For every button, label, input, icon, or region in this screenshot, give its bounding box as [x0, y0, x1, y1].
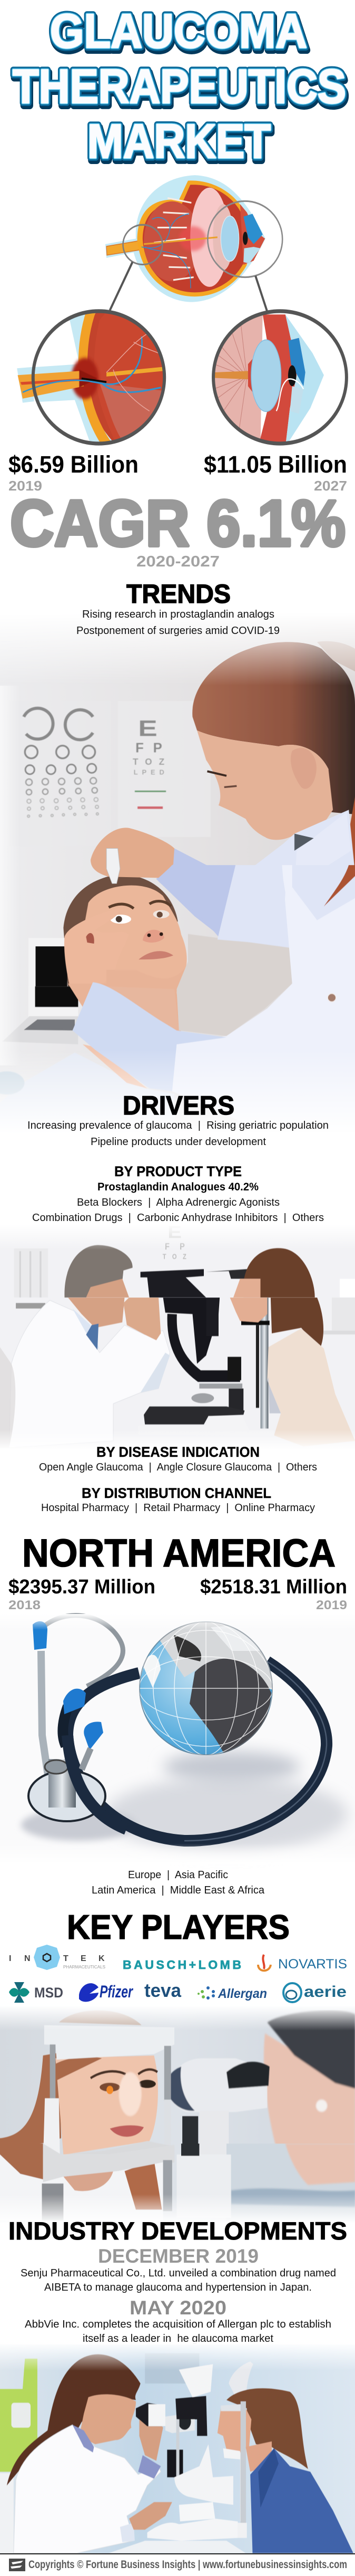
zoomed optic nerve lens: [17, 303, 172, 447]
dish: [0, 1071, 24, 1094]
logo: inotek: I: [9, 1954, 11, 1963]
segment: by distribution channel: [41, 1485, 315, 1514]
segment: by disease indication: Open Angle Glaucoma | Angle Closure Glaucoma | Others: [39, 1462, 317, 1473]
fade: [0, 1614, 355, 1630]
segment: by disease indication: BY DISEASE INDICATION: [96, 1444, 260, 1460]
development: may 2020: itself as a leader in he glaucoma market: [83, 2333, 273, 2344]
wall behind: [176, 934, 292, 1036]
metal tube: [45, 1616, 123, 1686]
white coat lower: [167, 865, 355, 1130]
doctor hands: [123, 1297, 161, 1340]
title: GLAUCOMA: [51, 7, 308, 61]
logo: aerie: [283, 1983, 347, 2002]
patient forehead hand and dropper: [91, 828, 174, 878]
wall chart: E: [167, 1223, 182, 1242]
wall chart: [163, 1223, 186, 1261]
title: GLAUCOMA: [50, 5, 307, 58]
laptop top: [28, 938, 65, 988]
logo: inotek: N: [24, 1954, 31, 1963]
logo: allergan: Allergan: [218, 1986, 267, 2001]
logo: novartis: [258, 1955, 347, 1972]
doctor upper sleeve: [159, 865, 235, 938]
patient hair: [59, 2010, 142, 2025]
doctor white coat: [9, 1300, 170, 1448]
shirt and tie: [73, 1309, 100, 1350]
other regions: [92, 1869, 265, 1896]
slit lamp body: [174, 2444, 233, 2505]
doctor left sleeve: [73, 982, 226, 1091]
development: may 2020: MAY 2020: [130, 2297, 226, 2319]
patient neck: [246, 2442, 272, 2472]
logo: novartis: NOVARTIS: [278, 1957, 347, 1972]
eye charts: LPED: [134, 768, 164, 776]
eye charts: TOZ: [133, 756, 164, 767]
exam device: [165, 2058, 270, 2112]
doctor coat: [218, 810, 355, 988]
segment: by product type: [32, 1164, 324, 1224]
heading: drivers: Pipeline products under development: [91, 1136, 266, 1148]
title: GLAUCOMA: [50, 5, 307, 58]
logo: aerie: aerie: [304, 1983, 347, 2001]
market value 2027: [204, 451, 347, 494]
footer: [0, 2553, 355, 2576]
segment: by product type: Combination Drugs | Carbonic Anhydrase Inhibitors | Others: [32, 1212, 324, 1224]
heading: drivers: [27, 1091, 329, 1148]
doctor sleeve: [156, 848, 235, 936]
wall and shelf: [14, 1248, 48, 1297]
wall chart: FP: [165, 1242, 185, 1252]
patient hair: [63, 874, 178, 988]
logo: inotek: K: [98, 1954, 105, 1963]
logo: pfizer: Pfizer: [100, 1982, 133, 2001]
other regions: Latin America | Middle East & Africa: [92, 1885, 265, 1896]
patient face lower: [68, 964, 188, 1033]
market value 2019: $6.59 Billion: [8, 451, 139, 478]
doctor hair: [192, 642, 355, 814]
stethoscope and globe: [0, 1614, 355, 1864]
slit lamp base: [144, 1407, 244, 1425]
patient neck: [91, 986, 179, 1042]
patient eyelid hand: [64, 908, 129, 988]
segment: by product type: BY PRODUCT TYPE: [114, 1164, 242, 1179]
shelf bar: [16, 1303, 45, 1309]
patient hair: [243, 1248, 315, 1297]
doctor hands: [139, 2408, 163, 2460]
logo: inotek: PHARMACEUTICALS: [63, 1965, 105, 1969]
laptop bottom: [28, 986, 78, 1017]
segment: by disease indication: [39, 1444, 317, 1473]
logo: msd: [9, 1982, 63, 2003]
heading: drivers: DRIVERS: [123, 1091, 234, 1120]
patient blue jumper: [0, 1053, 174, 1146]
doctor face lower: [68, 1297, 124, 1328]
logo: inotek: [9, 1945, 105, 1970]
market value 2019: [8, 451, 139, 494]
wall chart: TOZ: [163, 1253, 186, 1261]
segment: by distribution channel: Hospital Pharmacy | Retail Pharmacy | Online Pharmacy: [41, 1502, 315, 1514]
green wall panel: [0, 2359, 37, 2472]
logo: pfizer: [79, 1982, 133, 2002]
connector lines: [110, 262, 267, 312]
segment: by product type: Prostaglandin Analogues 40.2%: [97, 1181, 259, 1193]
logo: allergan: [198, 1986, 267, 2001]
region: north america: NORTH AMERICA: [22, 1531, 336, 1575]
zoomed lens and cornea lens: [213, 309, 349, 447]
top and bottom fades: [0, 612, 355, 686]
counter: [109, 2541, 246, 2553]
heading: trends: Rising research in prostaglandin analogs: [82, 609, 274, 620]
patient face: [55, 2055, 158, 2155]
development: december 2019: Senju Pharmaceutical Co., Ltd. unveiled a combination drug named: [21, 2267, 336, 2279]
market value 2027: 2027: [314, 478, 347, 494]
logo: teva: teva: [144, 1979, 182, 2001]
development: may 2020: AbbVie Inc. completes the acquisition of Allergan plc to establish: [25, 2319, 331, 2330]
logo: inotek: T: [63, 1954, 68, 1963]
title: MARKET: [87, 115, 271, 168]
patient hair: [226, 2388, 308, 2469]
slit lamp head: [141, 1269, 206, 1297]
heading: key players: KEY PLAYERS: [67, 1908, 290, 1946]
magnifier ring large: [208, 201, 282, 277]
patient face: [218, 2408, 251, 2453]
photo: ophthalmologist with slit lamp: [0, 1223, 355, 1459]
title: GLAUCOMA: [50, 5, 307, 58]
fade: [0, 1224, 355, 1250]
development: december 2019: DECEMBER 2019: [98, 2245, 259, 2267]
magnifier ring small: [123, 225, 162, 265]
icon: fortune business insights logo: [9, 2559, 25, 2571]
fades: [0, 2005, 355, 2031]
doctor neck blur: [285, 2144, 355, 2185]
doctor ponytail strands: [324, 796, 355, 905]
chin rest: [43, 2144, 174, 2182]
globe: [139, 1621, 273, 1755]
logo: bausch lomb: BAUSCH+LOMB: [123, 1958, 241, 1972]
region: north america: $2518.31 Million: [200, 1576, 347, 1598]
title: [13, 5, 347, 171]
segment: by distribution channel: BY DISTRIBUTION CHANNEL: [82, 1485, 271, 1501]
column: [260, 1297, 269, 1428]
development: december 2019: [21, 2245, 336, 2293]
slit lamp arm: [172, 1314, 240, 1376]
logo: msd: MSD: [34, 1985, 63, 2001]
title: MARKET: [88, 118, 272, 171]
logo: inotek: E: [81, 1954, 86, 1963]
heading: trends: [76, 579, 280, 637]
dark tube: [67, 1661, 327, 1841]
segment: by product type: Beta Blockers | Alpha Adrenergic Agonists: [77, 1197, 280, 1208]
CAGR: 2020-2027: [136, 553, 220, 570]
doctor face: [197, 730, 333, 840]
title: MARKET: [87, 115, 271, 168]
eye charts: [9, 701, 211, 846]
doctor coat: [14, 2425, 161, 2553]
region: north america: 2018: [8, 1598, 41, 1612]
region: north america: 2019: [316, 1598, 347, 1612]
development: december 2019: AIBETA to manage glaucoma and hypertension in Japan.: [44, 2282, 312, 2293]
photo: optometrist examining patient: [0, 2342, 355, 2554]
base plate: [138, 1416, 274, 1436]
other regions: Europe | Asia Pacific: [128, 1869, 228, 1881]
patient face and hair: [230, 1297, 267, 1322]
eye charts: FP: [135, 741, 162, 756]
doctor hair: [7, 2354, 141, 2486]
patient sweater: [267, 1329, 355, 1446]
doctor face: [86, 1279, 129, 1297]
region: north america: $2395.37 Million: [8, 1576, 155, 1598]
inner tube: [63, 1706, 68, 1746]
main eye cross-section: [105, 175, 265, 302]
eye charts: E: [138, 716, 157, 742]
heading: trends: Postponement of surgeries amid COVID-19: [76, 625, 280, 637]
patient blue shirt: [250, 2448, 353, 2553]
heading: trends: TRENDS: [126, 579, 231, 609]
title: MARKET: [87, 115, 271, 168]
region: north america: [8, 1531, 347, 1612]
tube highlight: [184, 1661, 327, 1841]
eye anatomy illustration: [17, 175, 349, 447]
development: may 2020: [25, 2297, 331, 2344]
doctor hair: [64, 1245, 133, 1297]
chin rest pillars: [43, 2098, 60, 2162]
heading: industry developments: INDUSTRY DEVELOPMENTS: [8, 2217, 347, 2245]
chest piece: [28, 1771, 105, 1821]
patient clothing: [0, 2155, 163, 2221]
blue ear tips: [33, 1621, 47, 1650]
doctor face: [79, 2395, 136, 2444]
heading: drivers: Increasing prevalence of glaucoma | Rising geriatric population: [27, 1120, 329, 1131]
photo: doctor giving eye drops: [0, 612, 355, 1160]
head frame: [44, 2025, 174, 2060]
slit lamp optics: [136, 2403, 165, 2426]
blurred doctor: [264, 2010, 355, 2162]
market value 2027: $11.05 Billion: [204, 451, 347, 478]
photo: patient at eye exam machine: [0, 2005, 355, 2228]
patient face: [84, 886, 187, 988]
market value 2019: 2019: [8, 478, 42, 494]
